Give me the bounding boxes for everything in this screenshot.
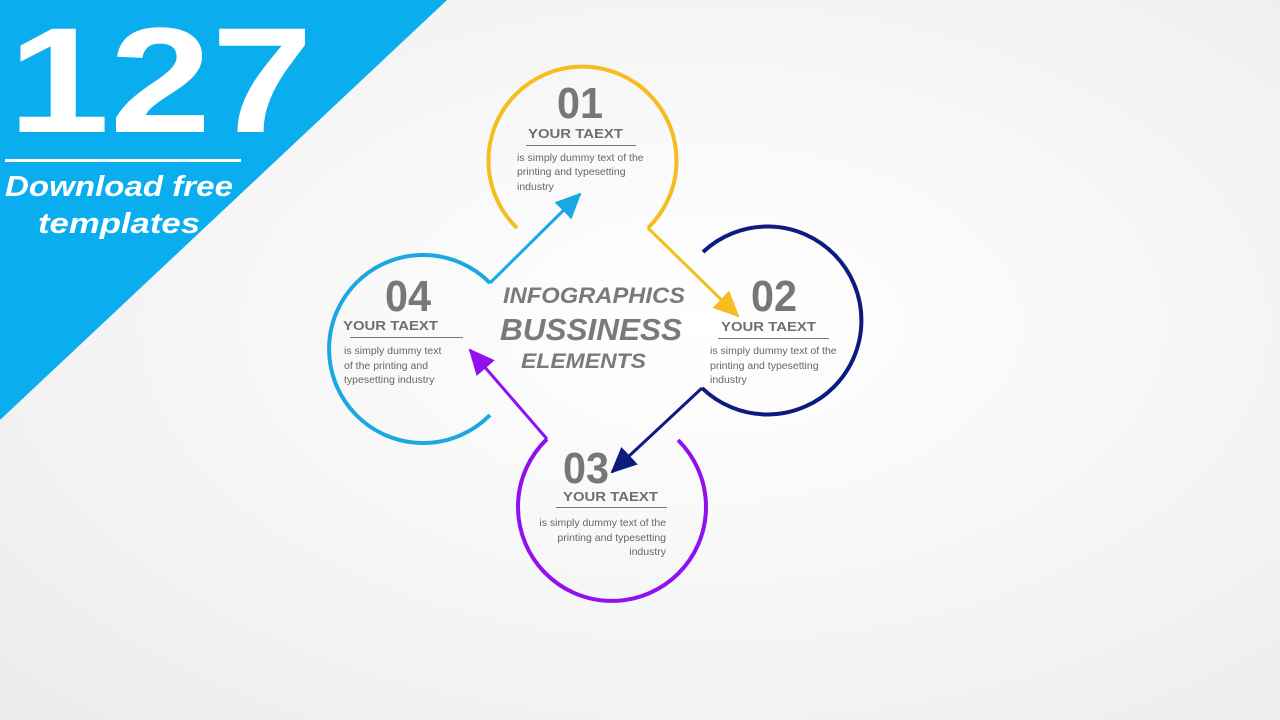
circle 02 (navy) (702, 226, 861, 414)
banner subtitle: templates (38, 208, 200, 240)
arrow 04 to 01 (490, 194, 580, 283)
circle 01 (yellow): printing and typesetting (517, 166, 626, 178)
circle 03 (purple): YOUR TAEXT (563, 489, 658, 504)
circle 02 (navy): YOUR TAEXT (721, 319, 816, 334)
circle 01 (yellow): is simply dummy text of the (517, 152, 644, 164)
circle 03 (purple): 03 (563, 444, 609, 493)
circle 01 (yellow): 01 (557, 79, 603, 128)
arrow 01 to 02 (648, 228, 738, 316)
circle 02 (navy): printing and typesetting (710, 360, 819, 372)
circle 01 (yellow) (488, 67, 676, 228)
banner: blue corner triangle (0, 0, 447, 420)
banner subtitle (5, 159, 241, 240)
circle 03 (purple): printing and typesetting (557, 532, 666, 544)
circle 04 (light blue): YOUR TAEXT (343, 318, 438, 333)
circle 04 (light blue) (329, 255, 490, 443)
banner subtitle: Download free (5, 171, 233, 203)
circle 02 (navy): industry (710, 374, 748, 386)
banner number 127: 127 (8, 0, 313, 164)
center title: INFOGRAPHICS (503, 283, 685, 308)
circle 03 (purple): is simply dummy text of the (539, 517, 666, 529)
circle 04 (light blue): of the printing and (344, 360, 428, 372)
circle 01 (yellow): industry (517, 181, 555, 193)
circle 01 (yellow): YOUR TAEXT (528, 126, 623, 141)
circle 04 (light blue): is simply dummy text (344, 345, 442, 357)
arrow 02 to 03 (612, 388, 702, 472)
arrow 03 to 04 (470, 350, 547, 439)
circle 02 (navy): 02 (751, 272, 797, 321)
center title: ELEMENTS (521, 350, 646, 373)
center title (500, 283, 685, 373)
circle 03 (purple): industry (629, 546, 667, 558)
circle 03 (purple) (518, 439, 706, 601)
circle 02 (navy): is simply dummy text of the (710, 345, 837, 357)
circle 04 (light blue): 04 (385, 272, 431, 321)
circle 04 (light blue): typesetting industry (344, 374, 435, 386)
center title: BUSSINESS (500, 312, 682, 347)
